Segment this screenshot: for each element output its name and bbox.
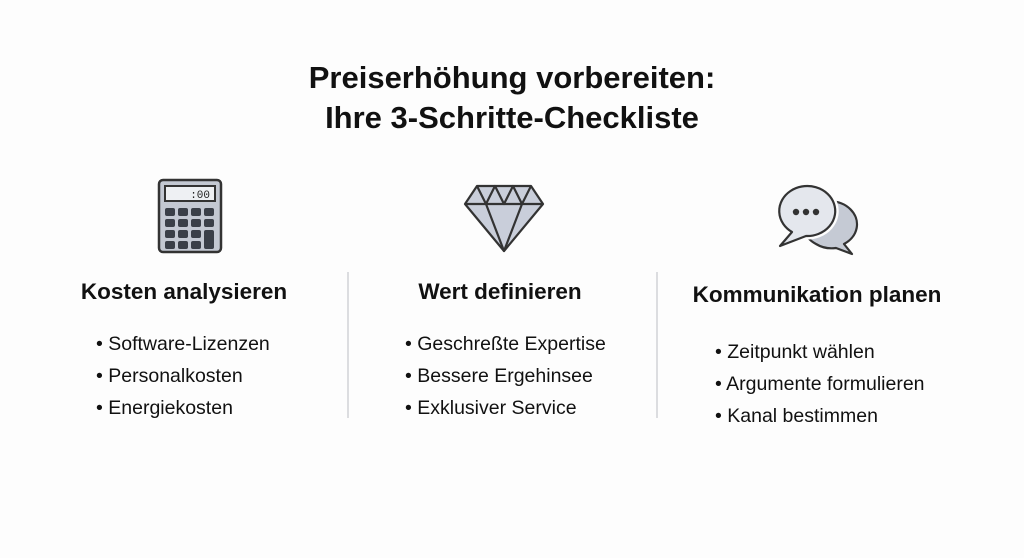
heading: Kosten analysieren: Kosten analysieren bbox=[81, 279, 287, 304]
list: value: Geschreßte Expertise bbox=[417, 333, 606, 355]
list: costs: Personalkosten bbox=[108, 365, 243, 387]
icon: calculator bbox=[158, 178, 222, 254]
list: communication: Argumente formulieren bbox=[726, 373, 925, 395]
list: costs: Software-Lizenzen bbox=[108, 333, 270, 355]
list: value bbox=[406, 333, 606, 419]
list: communication: Zeitpunkt wählen bbox=[727, 341, 875, 363]
list: costs: Energiekosten bbox=[108, 397, 233, 419]
list: communication bbox=[716, 341, 925, 427]
icon: calculator: :00 bbox=[190, 190, 210, 202]
list: costs bbox=[96, 333, 270, 419]
icon: diamond bbox=[464, 184, 544, 252]
title: Ihre 3-Schritte-Checkliste bbox=[325, 100, 699, 135]
list: value: Exklusiver Service bbox=[417, 397, 577, 419]
heading: Wert definieren: Wert definieren bbox=[418, 279, 582, 304]
heading: Kommunikation planen: Kommunikation planen bbox=[693, 282, 941, 307]
list: communication: Kanal bestimmen bbox=[727, 405, 878, 427]
title: Preiserhöhung vorbereiten: bbox=[309, 60, 715, 95]
title bbox=[309, 60, 715, 135]
icon: chat bubbles bbox=[778, 184, 858, 256]
list: value: Bessere Ergehinsee bbox=[417, 365, 593, 387]
